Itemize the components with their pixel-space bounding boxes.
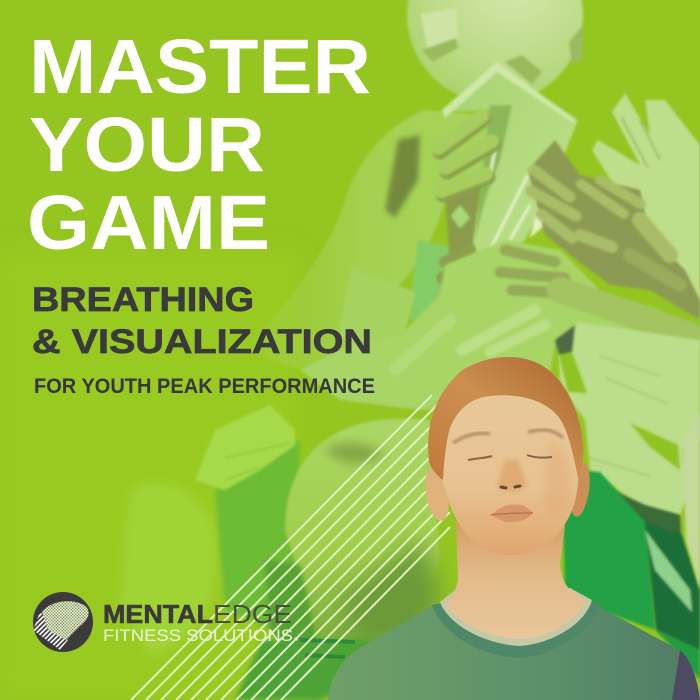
right eyebrow — [528, 430, 563, 438]
shirt right shade — [672, 650, 700, 700]
fingers gripping trophy, left — [438, 116, 494, 195]
shadow behind trophy stem — [445, 175, 482, 265]
pale hands, right — [558, 322, 700, 515]
subtitle: BREATHING — [32, 281, 254, 319]
trophy ball — [407, 0, 583, 103]
left ear — [421, 466, 453, 522]
logo wordmark: MENTAL — [103, 599, 213, 629]
player head edge, right — [682, 410, 700, 590]
white diagonal stripes — [131, 395, 450, 700]
background gaps between right hands — [555, 325, 680, 470]
right ear — [567, 462, 593, 518]
hair — [428, 357, 583, 480]
neck — [446, 520, 585, 639]
logo icon: brain in circle — [33, 592, 93, 652]
title: GAME — [27, 180, 270, 266]
small hand below trophy stem — [442, 250, 472, 294]
tagline: FOR YOUTH PEAK PERFORMANCE — [34, 375, 375, 398]
dark hollow beneath right hand — [612, 490, 682, 550]
title: YOUR — [29, 102, 265, 188]
face — [438, 388, 578, 555]
left soft glow — [0, 250, 300, 700]
blurred hand, lower left — [195, 405, 295, 490]
logo tagline: FITNESS SOLUTIONS — [103, 627, 293, 645]
shirt — [328, 602, 700, 700]
cheek shade — [545, 440, 571, 517]
trophy body — [442, 62, 578, 272]
left arm and hand behind trophy — [245, 110, 495, 370]
title: MASTER — [29, 24, 371, 110]
nose — [497, 460, 527, 492]
title — [27, 24, 371, 266]
subtitle — [32, 281, 372, 361]
sweatshirt collar band — [432, 590, 600, 658]
nostrils — [501, 486, 520, 488]
lower hands group, centre — [300, 240, 700, 410]
lips — [491, 504, 533, 522]
logo: EDGE — [213, 599, 292, 629]
raised open hand, top right — [592, 93, 700, 320]
logo — [33, 592, 298, 652]
left closed eye — [468, 456, 492, 460]
subtitle: & VISUALIZATION — [32, 323, 372, 361]
green jacket, right — [562, 470, 700, 680]
boy — [328, 357, 700, 700]
right closed eye — [527, 455, 552, 458]
olive hands on trophy, centre right — [528, 140, 700, 320]
sleeve cuff, left — [338, 268, 416, 348]
undershirt collar — [440, 588, 592, 646]
green gap behind hands — [410, 240, 470, 320]
left eyebrow — [453, 433, 490, 443]
blurred players, lower left — [120, 418, 440, 700]
